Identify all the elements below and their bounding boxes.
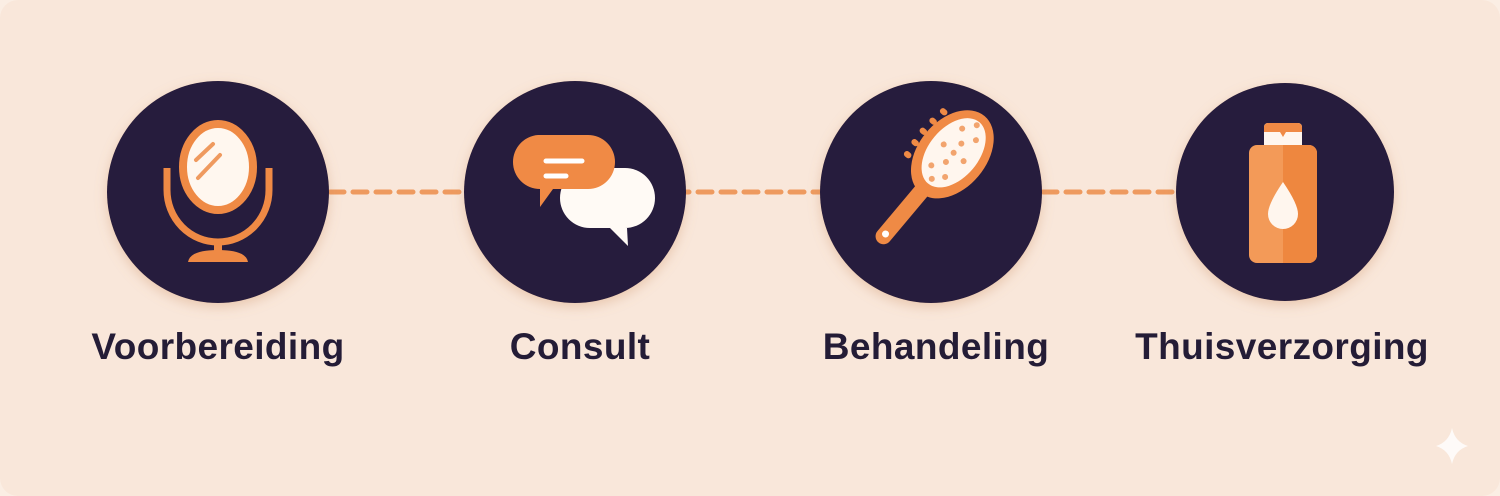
label: Voorbereiding: Voorbereiding (91, 326, 345, 367)
label: Consult: Consult (510, 326, 650, 367)
sparkle icon (1436, 428, 1468, 464)
icon: bottle with drop (1249, 123, 1317, 263)
step 4 circle: bottle (1176, 83, 1394, 301)
label: Behandeling: Behandeling (823, 326, 1049, 367)
label: Thuisverzorging: Thuisverzorging (1135, 326, 1429, 367)
icon: mirror (167, 124, 269, 262)
icon: speech bubbles (513, 135, 655, 246)
step 3 circle: brush (820, 81, 1042, 303)
icon: hair brush (847, 90, 1011, 264)
step 1 circle: mirror (107, 81, 329, 303)
step 2 circle: chat (464, 81, 686, 303)
connector: dashed line (330, 190, 1176, 194)
